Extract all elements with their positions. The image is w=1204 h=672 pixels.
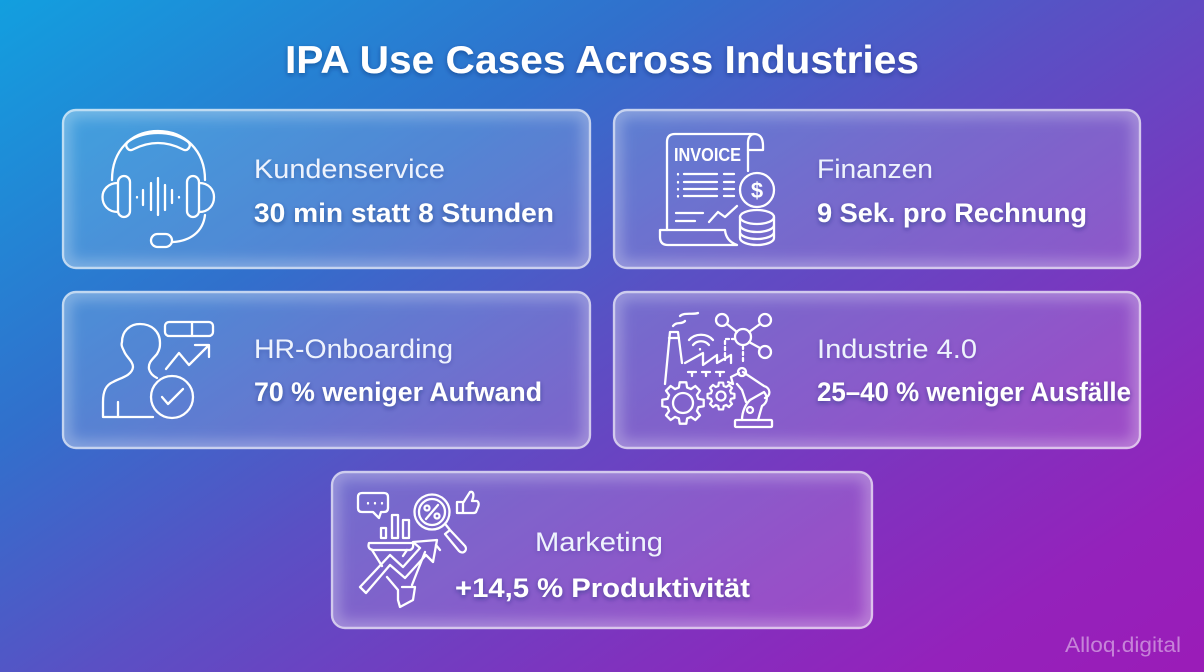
panel: Kundenservice [62,109,591,269]
label: HR-Onboarding: HR-Onboarding [254,334,453,364]
label: Industrie 4.0: Industrie 4.0 [817,334,977,364]
panel: HR-Onboarding [62,291,591,449]
watermark: Alloq.digital [1065,634,1181,657]
title: IPA Use Cases Across Industries [285,39,919,82]
icon: factory, network, gears and robot arm [662,313,772,427]
value: 30 min statt 8 Stunden: 30 min statt 8 Stunden [254,198,554,228]
panel: Finanzen [613,109,1141,269]
panel: Marketing [331,471,873,629]
icon: person with growth check [103,322,213,418]
value: 9 Sek. pro Rechnung: 9 Sek. pro Rechnung [817,198,1087,228]
value: 70 % weniger Aufwand: 70 % weniger Aufwand [254,377,542,407]
label: Kundenservice: Kundenservice [254,154,445,184]
value: 25–40 % weniger Ausfälle: 25–40 % weniger Ausfälle [817,377,1131,407]
label: Marketing: Marketing [535,527,663,557]
icon: funnel, magnifier and growth arrow [358,492,479,607]
value: +14,5 % Produktivität: +14,5 % Produktivität [455,573,750,603]
label: Finanzen: Finanzen [817,154,933,184]
icon: invoice with coins: INVOICE [674,144,741,165]
panel: Industrie 4.0 [613,291,1141,449]
icon: invoice with coins: $ [751,178,763,203]
icon: invoice with coins [660,134,774,245]
icon: headset [102,131,214,247]
